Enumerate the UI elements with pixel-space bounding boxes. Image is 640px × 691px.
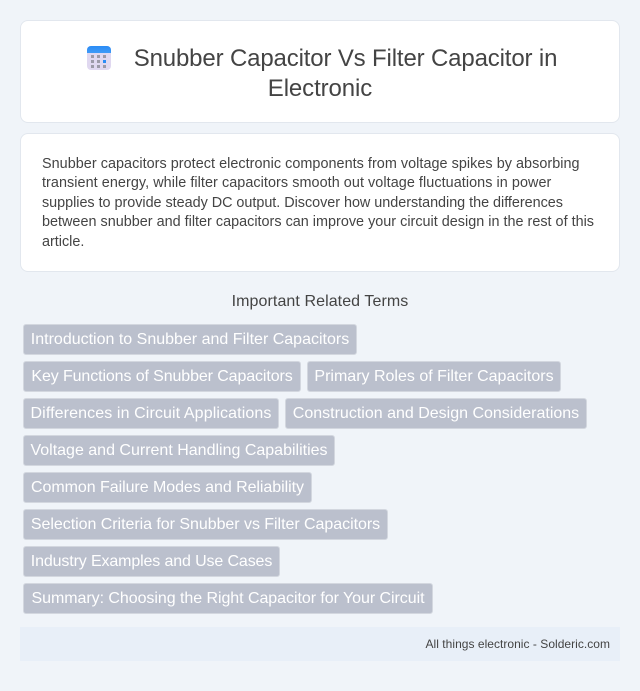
intro paragraph: supplies to provide steady DC output. Discover how understanding the differences xyxy=(42,195,563,211)
tag: Common Failure Modes and Reliability xyxy=(31,479,304,496)
intro paragraph: between snubber and filter capacitors can improve your circuit design in the rest of this xyxy=(42,214,594,230)
tag: Primary Roles of Filter Capacitors xyxy=(314,368,554,385)
heading: related terms: Important Related Terms xyxy=(232,293,408,310)
tag xyxy=(23,583,433,614)
intro paragraph: Snubber capacitors protect electronic components from voltage spikes by absorbing xyxy=(42,156,580,172)
title xyxy=(134,45,557,102)
title: Electronic xyxy=(268,75,372,102)
tag xyxy=(23,361,301,392)
tag: Voltage and Current Handling Capabilities xyxy=(30,442,328,459)
panel: title card xyxy=(20,20,620,123)
tag: Summary: Choosing the Right Capacitor for Your Circuit xyxy=(31,590,425,607)
intro paragraph xyxy=(42,156,594,250)
tag xyxy=(285,398,587,429)
tag xyxy=(23,509,388,540)
intro paragraph: article. xyxy=(42,234,84,250)
tag: Introduction to Snubber and Filter Capacitors xyxy=(31,331,349,348)
tag: Differences in Circuit Applications xyxy=(30,405,272,422)
title: Snubber Capacitor Vs Filter Capacitor in xyxy=(134,45,557,72)
tag xyxy=(23,546,280,577)
tag: Construction and Design Considerations xyxy=(293,405,579,422)
footer credit: All things electronic - Solderic.com xyxy=(426,637,610,651)
tag xyxy=(23,472,312,503)
tag xyxy=(23,324,357,355)
footer xyxy=(20,627,620,661)
tag xyxy=(23,435,335,466)
tag xyxy=(23,398,279,429)
tag: Industry Examples and Use Cases xyxy=(31,553,272,570)
panel: term tags xyxy=(23,324,587,614)
icon: calendar xyxy=(87,46,111,70)
panel: intro text xyxy=(20,133,620,272)
tag: Key Functions of Snubber Capacitors xyxy=(31,368,293,385)
tag: Selection Criteria for Snubber vs Filter Capacitors xyxy=(31,516,380,533)
tag xyxy=(307,361,561,392)
intro paragraph: transient energy, while filter capacitors smooth out voltage fluctuations in power xyxy=(42,175,551,191)
